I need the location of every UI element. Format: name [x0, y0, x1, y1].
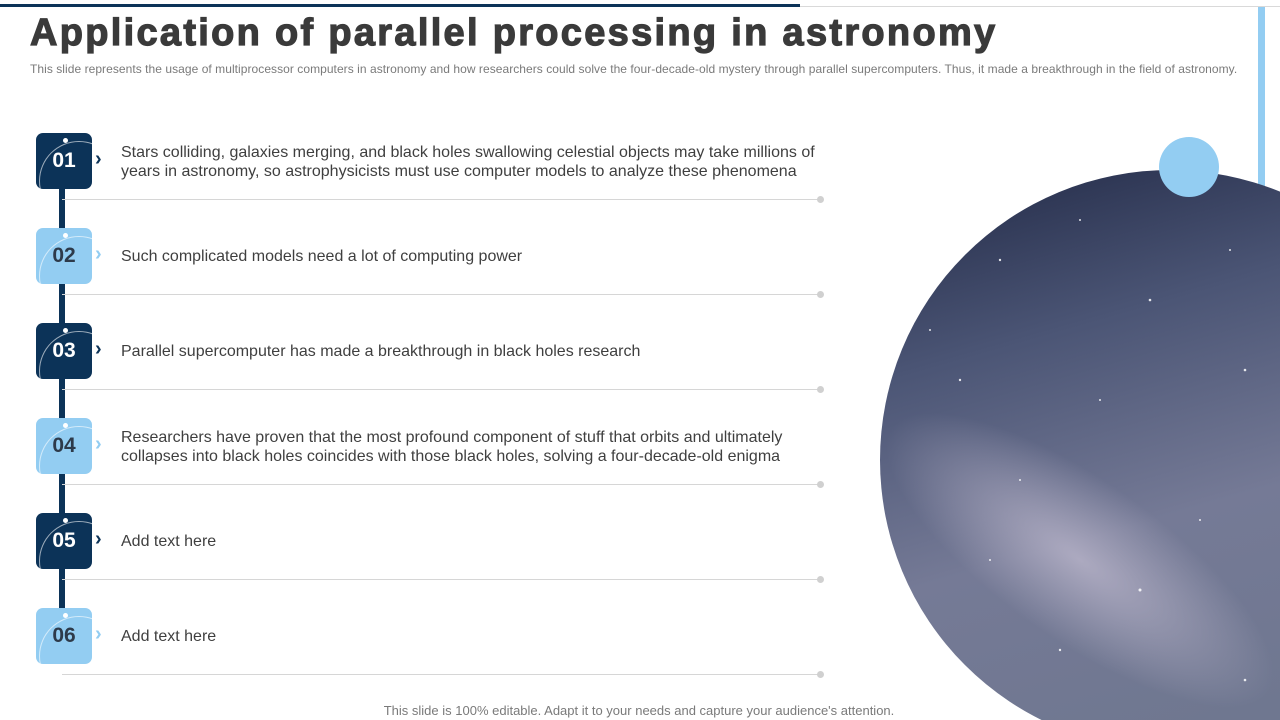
item 02: Such complicated models need a lot of computing power — [121, 248, 522, 265]
item 05: 05 — [52, 529, 76, 552]
item 04: › — [95, 433, 102, 455]
item 06 — [36, 608, 824, 678]
item 04: Researchers have proven that the most profound component of stuff that orbits and ultimately collapses into black holes coincides with those black holes, solving a four-decade-old enigma — [121, 429, 782, 465]
item 06: 06 — [52, 624, 76, 647]
timeline vertical line — [59, 160, 65, 635]
item 03: Parallel supercomputer has made a breakthrough in black holes research — [121, 343, 640, 360]
item 02: › — [95, 243, 102, 265]
right accent bar — [1258, 7, 1265, 207]
item 05: Add text here — [121, 533, 216, 550]
item 02 — [36, 228, 824, 298]
item 06: › — [95, 623, 102, 645]
galaxy image circle — [880, 170, 1280, 720]
accent circle — [1159, 137, 1219, 197]
item 01 — [36, 133, 824, 203]
item 05: › — [95, 528, 102, 550]
title: Application of parallel processing in astronomy — [30, 12, 997, 54]
top accent line — [0, 4, 800, 7]
footer note: This slide is 100% editable. Adapt it to your needs and capture your audience's attention. — [384, 703, 894, 718]
item 03 — [36, 323, 824, 393]
item 04: 04 — [52, 434, 76, 457]
item 01: Stars colliding, galaxies merging, and black holes swallowing celestial objects may take millions of years in astronomy, so astrophysicists must use computer models to analyze these phenomena — [121, 144, 815, 180]
item 01: › — [95, 148, 102, 170]
item 01: 01 — [52, 149, 76, 172]
item 05 — [36, 513, 824, 583]
subtitle: This slide represents the usage of multiprocessor computers in astronomy and how researchers could solve the four-decade-old mystery through parallel supercomputers. Thus, it made a breakthrough in the field of astronomy. — [30, 62, 1237, 76]
list items — [36, 133, 824, 678]
item 06: Add text here — [121, 628, 216, 645]
item 02: 02 — [52, 244, 76, 267]
item 03: › — [95, 338, 102, 360]
item 04 — [36, 418, 824, 488]
item 03: 03 — [52, 339, 76, 362]
